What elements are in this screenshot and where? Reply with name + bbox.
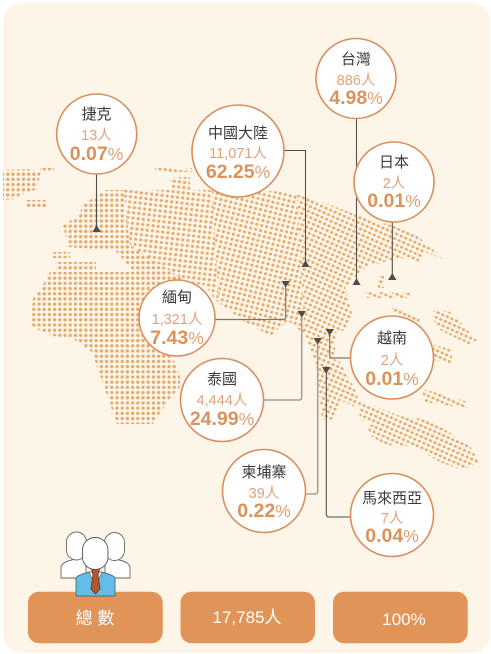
- circle: China: 11,071人: [209, 145, 267, 162]
- circle: China: 62.25%: [206, 161, 270, 183]
- circle: China: [192, 105, 284, 197]
- circle: Japan: 0.01%: [367, 190, 421, 212]
- circle: Vietnam: [350, 316, 434, 399]
- total percent button: 100%: [382, 610, 426, 629]
- icon: business people: [61, 532, 130, 596]
- circle: Malaysia: 7人: [381, 510, 403, 527]
- circle: Thailand: 泰國: [207, 371, 237, 388]
- circle: Cambodia: 柬埔寨: [241, 463, 287, 481]
- total percent button: [333, 592, 468, 643]
- connector: Myanmar: [215, 281, 290, 320]
- circle: Czech: [57, 94, 137, 174]
- circle: Malaysia: 0.04%: [365, 525, 419, 547]
- circle: Vietnam: 越南: [377, 330, 407, 347]
- circle: China: 中國大陸: [208, 125, 268, 142]
- circle: Vietnam: 2人: [381, 352, 403, 369]
- circle: Cambodia: [222, 450, 306, 532]
- circle: Malaysia: 馬來西亞: [362, 490, 422, 507]
- circle: Myanmar: 1,321人: [152, 311, 202, 328]
- circle: Japan: 2人: [383, 175, 405, 192]
- total count button: 17,785人: [212, 608, 282, 627]
- total count button: [180, 592, 315, 643]
- circle: Taiwan: [316, 38, 396, 118]
- circle: Cambodia: 39人: [249, 485, 279, 502]
- circle: Myanmar: [139, 280, 215, 356]
- circle: Thailand: [180, 358, 264, 442]
- circle: Myanmar: 緬甸: [162, 289, 192, 306]
- total label button: 總 數: [76, 609, 114, 628]
- total label button: [28, 592, 163, 643]
- connector: China: [284, 150, 310, 267]
- circle: Thailand: 24.99%: [190, 408, 254, 430]
- circle: Thailand: 4,444人: [197, 392, 247, 409]
- connector: Cambodia: [306, 338, 322, 494]
- circle: Taiwan: 4.98%: [329, 87, 383, 109]
- circle: Taiwan: 886人: [337, 72, 375, 89]
- circle: Myanmar: 7.43%: [150, 327, 204, 349]
- connector: Malaysia: [322, 367, 350, 517]
- connector: Czech: [92, 173, 101, 232]
- circle: Czech: 0.07%: [70, 143, 123, 165]
- circle: Czech: 捷克: [81, 106, 112, 123]
- circle: Cambodia: 0.22%: [237, 500, 291, 522]
- circle: Czech: 13人: [81, 127, 112, 144]
- connector: Vietnam: [326, 329, 350, 358]
- dotted world map: [0, 160, 491, 480]
- circle: Taiwan: 台灣: [341, 51, 371, 68]
- connector: Thailand: [264, 311, 306, 400]
- circle: Vietnam: 0.01%: [365, 368, 419, 390]
- circle: Japan: 日本: [379, 154, 409, 171]
- circle: Malaysia: [350, 474, 434, 556]
- circle: Japan: [354, 142, 434, 222]
- connector: Japan: [388, 221, 396, 280]
- connector: Taiwan: [352, 118, 360, 285]
